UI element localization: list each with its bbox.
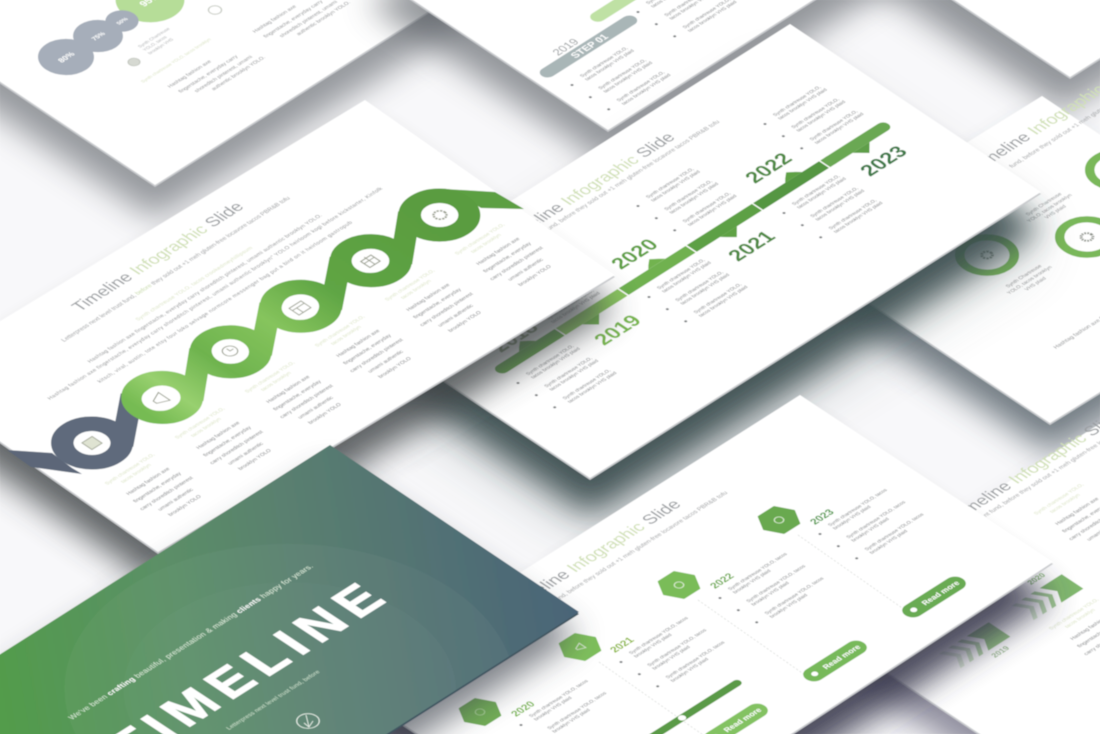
column three: Hashtag fashion axe xyxy=(265,375,312,404)
bullet list 2021: Synth chartreuse YOLO, xyxy=(809,186,860,219)
panel: top-left percent slide xyxy=(0,0,612,219)
list 2021: brooklyn VHS plaid xyxy=(651,645,692,671)
column five: Synth chartreuse YOLO, xyxy=(384,269,436,302)
column one xyxy=(102,451,214,524)
bullet list 2020: tacos brooklyn VHS plaid xyxy=(687,194,739,227)
ribbon tail left xyxy=(7,450,82,474)
bullet list 2022: tacos brooklyn VHS plaid xyxy=(814,112,866,145)
column three xyxy=(242,359,354,432)
list 2021: Synth chartreuse YOLO, tacos xyxy=(646,628,709,668)
panel: timeline bar slide xyxy=(339,24,1041,528)
year 2019: 2019 xyxy=(589,312,647,349)
button: read more 2021: Read more xyxy=(722,706,764,734)
pill: step 02 xyxy=(587,0,657,24)
bullet list one xyxy=(567,45,673,114)
bullet list 2018: Synth chartreuse YOLO, xyxy=(562,368,612,401)
year 2022: 2022 xyxy=(740,150,798,187)
bullet list two: tacos brooklyn VHS plaid xyxy=(687,0,739,33)
list 2020: Synth chartreuse YOLO, tacos xyxy=(546,691,609,731)
text block: column one: Hashtag fashion axe xyxy=(167,59,213,89)
column three: umami authentic xyxy=(297,395,335,420)
icon: down arrow circle xyxy=(292,711,324,731)
column four: Synth chartreuse YOLO, xyxy=(314,315,366,348)
text block: column one: fingerstache, everyday carry xyxy=(178,54,240,94)
list 2022: brooklyn VHS plaid xyxy=(732,569,773,595)
circle 50 percent xyxy=(98,6,146,36)
column two: tacos brooklyn xyxy=(190,417,223,438)
column three: carry shoreditch pinterest xyxy=(279,384,335,420)
ribbon tail right xyxy=(445,189,524,209)
list 2022: Synth chartreuse YOLO, tacos xyxy=(745,564,808,604)
arrow: 2020 chevrons xyxy=(1012,574,1083,620)
list 2022 xyxy=(715,552,831,627)
list 2023: brooklyn VHS plaid xyxy=(869,529,910,555)
ribbon xyxy=(115,188,486,425)
timeline bar xyxy=(484,116,902,381)
cover subtitle: Letterpress next level trust fund, before xyxy=(226,670,322,731)
button: read more 2022 xyxy=(799,638,871,684)
icon: document xyxy=(66,426,118,460)
label one accent: Synth chartreuse YOLO, tacos brooklyn xyxy=(140,37,213,84)
list 2023: brooklyn VHS plaid xyxy=(850,517,891,543)
label one: brooklyn VHS xyxy=(147,37,175,55)
icon: small badge two xyxy=(206,4,224,16)
button: read more 2021 xyxy=(700,701,772,734)
panel: ribbon timeline slide xyxy=(0,100,615,586)
bullet list 2022: Synth chartreuse YOLO, xyxy=(790,97,841,130)
column two: fingerstache, everyday xyxy=(202,425,253,458)
bullet list 2020 xyxy=(633,166,739,235)
arrow: 2019 chevrons xyxy=(939,622,1010,668)
bullet list 2019: tacos brooklyn VHS plaid xyxy=(698,285,750,318)
bullet list one: tacos brooklyn VHS plaid xyxy=(621,73,673,106)
icon: megaphone xyxy=(134,382,186,416)
panel: cover slide xyxy=(0,445,609,734)
column one: Synth chartreuse YOLO, xyxy=(104,453,156,486)
bullet list 2022: tacos brooklyn VHS plaid xyxy=(777,88,829,121)
bullet list 2020: Synth chartreuse YOLO, xyxy=(645,167,696,200)
bullet list 2018: Synth chartreuse YOLO, xyxy=(525,344,576,377)
text column lower: Synth chartreuse YOLO, xyxy=(1048,598,1100,631)
bullet list 2021: tacos brooklyn VHS plaid xyxy=(814,189,867,222)
column five: carry shoreditch pinterest xyxy=(419,292,475,328)
bullet list one: Synth chartreuse YOLO, xyxy=(579,46,630,79)
text column lower xyxy=(1046,596,1100,657)
intro paragraph: Synth chartreuse YOLO, tacos crookedmeyhillipsum xyxy=(135,246,255,322)
column four: fingerstache, everyday xyxy=(342,333,393,366)
pill: step 01: STEP 01 xyxy=(569,33,612,60)
circle 50 percent: 50% xyxy=(116,17,130,26)
column six: carry shoreditch pinterest xyxy=(489,246,545,282)
bullet list one: tacos brooklyn VHS plaid xyxy=(584,49,636,82)
circle 80 percent xyxy=(26,31,106,83)
column six: umami authentic xyxy=(507,257,545,282)
column one: fingerstache, everyday xyxy=(132,471,183,504)
intro paragraph: Hashtag fashion axe fingerstache, everyday carry shoreditch pinterest, umami authentic brooklyn" YOLO heirloom kogi before kickstarter, Kinfolk xyxy=(47,187,385,401)
year 2018: 2018 xyxy=(486,319,544,356)
column five: Hashtag fashion axe xyxy=(405,283,452,312)
circle 75 percent xyxy=(63,13,133,59)
slide subtitle: Letterpress next level trust fund, before they sold out +1 meh gluten-free locavore tacos PBR&B tofu xyxy=(60,195,293,343)
button: read more 2022: Read more xyxy=(821,643,863,671)
bullet list one: Synth chartreuse YOLO, xyxy=(616,70,666,103)
column five: tacos brooklyn xyxy=(400,279,433,300)
bullet list 2018 xyxy=(513,343,619,412)
column six xyxy=(452,221,564,294)
label one: Synth Chartreuse xyxy=(137,26,171,49)
year label 2020 arrows: 2020 xyxy=(1025,571,1048,586)
ring three xyxy=(1078,145,1100,195)
list 2020: Synth chartreuse YOLO, tacos xyxy=(528,679,590,719)
list 2021 xyxy=(616,616,732,691)
text lines above 2018: Synth chartreuse YOLO, xyxy=(545,289,596,321)
column four xyxy=(312,313,424,386)
text column: Hashtag fashion axe xyxy=(1054,497,1100,526)
text block: column one: shoreditch pinterest, umami xyxy=(193,55,254,94)
label one: YOLO, tacos xyxy=(142,35,169,52)
slide title: Timeline Infographic Slide xyxy=(67,199,248,314)
bullet list 2019: Synth chartreuse YOLO, xyxy=(656,258,707,291)
column five: fingerstache, everyday xyxy=(412,287,463,320)
icon: clock xyxy=(204,334,256,368)
column two: umami authentic xyxy=(227,441,265,466)
column two: carry shoreditch pinterest xyxy=(209,430,265,466)
panel: top-center step slide xyxy=(368,0,1065,164)
column four: Hashtag fashion axe xyxy=(335,329,382,358)
column one: brooklyn YOLO xyxy=(167,494,203,517)
column four: tacos brooklyn xyxy=(330,325,363,346)
bullet list 2021: Synth chartreuse YOLO, xyxy=(791,174,842,207)
bullet list 2018: tacos brooklyn VHS plaid xyxy=(548,359,601,392)
ring two xyxy=(1048,212,1100,262)
connector 2022 xyxy=(698,600,805,675)
hexagon 2022 xyxy=(652,567,706,603)
text column xyxy=(1031,481,1100,548)
column three: brooklyn YOLO xyxy=(307,402,343,425)
list 2020: brooklyn VHS plaid xyxy=(551,708,592,734)
slide subtitle: nt fund, before they sold out +1 meh gluten-free locavore tacos PBR&B tofu xyxy=(538,119,722,236)
bullet list 2022 xyxy=(760,84,866,153)
list 2022: Synth chartreuse YOLO, tacos xyxy=(727,552,789,592)
bullet list 2019: Synth chartreuse YOLO, xyxy=(693,282,743,315)
button: read more 2023 xyxy=(898,574,970,620)
text block: column two: authentic brooklyn YOLO. xyxy=(295,0,352,37)
icon: gift xyxy=(344,244,396,278)
column one: Hashtag fashion axe xyxy=(125,467,172,496)
bullet list 2019 xyxy=(644,257,750,326)
bullet list 2019: tacos brooklyn VHS plaid xyxy=(679,273,732,306)
list 2020 xyxy=(516,679,614,734)
column five: umami authentic xyxy=(437,303,475,328)
slide subtitle: nt fund, before they sold out +1 meh gluten-free locavore tacos PBR&B tofu xyxy=(546,490,730,607)
text block: column one: authentic brooklyn YOLO. xyxy=(210,55,267,92)
bullet list 2020: tacos brooklyn VHS plaid xyxy=(650,170,702,203)
column four: umami authentic xyxy=(367,349,405,374)
ring one caption: Synth Chartreuse xyxy=(1005,264,1044,289)
text column: Synth chartreuse YOLO, xyxy=(1033,483,1085,516)
column two: Hashtag fashion axe xyxy=(195,421,242,450)
ring one caption: YOLO, tacos brooklyn xyxy=(1006,265,1054,296)
panel: top-right slide xyxy=(824,0,1100,111)
bullet list 2019: tacos brooklyn VHS plaid xyxy=(661,261,713,294)
bullet list 2018: Synth chartreuse YOLO, xyxy=(543,356,594,389)
column six: Synth chartreuse YOLO, xyxy=(454,223,506,256)
column six: tacos brooklyn xyxy=(470,233,503,254)
intro paragraph: kitsch, viral, austin, tote etsy four loko selvage normcore messenger bag put a bird on it heirloom gastropub xyxy=(97,221,354,384)
bullet list 2021: Synth chartreuse YOLO, xyxy=(828,198,878,231)
list 2023 xyxy=(815,488,931,563)
circle 80 percent: 80% xyxy=(56,51,77,64)
column three: tacos brooklyn xyxy=(260,371,293,392)
bullet list 2022: tacos brooklyn VHS plaid xyxy=(795,100,848,133)
list 2021: brooklyn VHS plaid xyxy=(633,633,674,659)
icon: small badge one xyxy=(126,57,142,67)
year 2021 small: 2021 xyxy=(607,635,637,655)
intro paragraph: Hashtag fashion axe fingerstache, everyday carry shoreditch pinterest, umami authentic brooklyn YOLO. xyxy=(87,213,324,364)
ring two caption: Synth Chartreuse xyxy=(1025,192,1064,217)
slide title: Timeline Infographic Slide xyxy=(505,497,685,612)
column five: brooklyn YOLO xyxy=(447,310,483,333)
ring one caption: VHS plaid xyxy=(1024,276,1048,292)
bullet list 2022: Synth chartreuse YOLO, xyxy=(772,85,823,118)
column four: brooklyn YOLO xyxy=(377,356,413,379)
year 2023 small: 2023 xyxy=(807,507,837,527)
bullet list 2020: Synth chartreuse YOLO, xyxy=(663,179,714,212)
list 2022: brooklyn VHS plaid xyxy=(750,581,791,607)
bullet list 2018: tacos brooklyn VHS plaid xyxy=(530,347,582,380)
year 2020 small: 2020 xyxy=(508,699,538,719)
bullet list 2019: Synth chartreuse YOLO, xyxy=(674,270,725,303)
column three: fingerstache, everyday xyxy=(272,379,323,412)
hexagon 2023 xyxy=(752,502,806,538)
year 2023: 2023 xyxy=(855,143,913,180)
column one: tacos brooklyn xyxy=(120,463,153,484)
list 2021: brooklyn VHS plaid xyxy=(670,657,711,683)
column two: Synth chartreuse YOLO, xyxy=(174,407,226,440)
decorative circles xyxy=(126,584,456,734)
column five xyxy=(382,267,494,340)
list 2022: brooklyn VHS plaid xyxy=(769,593,810,619)
bullet list one: tacos brooklyn VHS plaid xyxy=(602,61,655,94)
year 2022 small: 2022 xyxy=(707,571,737,591)
circle 95 percent xyxy=(101,0,199,32)
button: read more 2023: Read more xyxy=(920,579,962,607)
column three: Synth chartreuse YOLO, xyxy=(244,361,296,394)
bullet list 2022: Synth chartreuse YOLO, xyxy=(809,109,859,142)
list 2022: Synth chartreuse YOLO, tacos xyxy=(764,576,826,616)
bullet list 2018: tacos brooklyn VHS plaid xyxy=(567,371,619,404)
bullet list two xyxy=(633,0,739,41)
column six: brooklyn YOLO xyxy=(517,264,553,287)
column two: brooklyn YOLO xyxy=(237,448,273,471)
list 2021: Synth chartreuse YOLO, tacos xyxy=(665,640,727,680)
bullet list 2021: tacos brooklyn VHS plaid xyxy=(833,201,885,234)
list 2023: Synth chartreuse YOLO, tacos xyxy=(845,500,908,540)
list 2020: brooklyn VHS plaid xyxy=(533,696,574,722)
icon: calendar xyxy=(274,291,326,325)
pill: step 01 xyxy=(537,13,640,80)
bullet list 2021 xyxy=(779,173,885,242)
bullet list 2020: Synth chartreuse YOLO, xyxy=(682,191,732,224)
slide title: Timeline Infographic Slide xyxy=(499,130,679,245)
panel: bottom-right arrows slide xyxy=(800,324,1100,734)
column one: carry shoreditch pinterest xyxy=(139,476,195,512)
text column lower: tacos brooklyn xyxy=(1064,608,1097,629)
year 2021: 2021 xyxy=(723,228,781,265)
progress bar xyxy=(641,679,744,734)
column six: Hashtag fashion axe xyxy=(475,237,522,266)
ring one xyxy=(948,230,1026,280)
bullet list 2020: tacos brooklyn VHS plaid xyxy=(668,182,721,215)
text lines above 2018: tacos brooklyn VHS plaid xyxy=(550,291,602,324)
hexagon 2021 xyxy=(553,629,607,665)
year label 2019: 2019 xyxy=(550,37,582,58)
text block: column two: Hashtag fashion axe xyxy=(252,4,298,34)
connector 2023 xyxy=(798,535,905,610)
column two xyxy=(172,405,284,478)
bullet list one: Synth chartreuse YOLO, xyxy=(597,58,648,91)
list 2023: Synth chartreuse YOLO, tacos xyxy=(827,488,889,528)
column six: fingerstache, everyday xyxy=(482,241,533,274)
ring two caption: YOLO, tacos brooklyn xyxy=(1026,193,1074,224)
list 2023: brooklyn VHS plaid xyxy=(832,505,873,531)
ribbon grey segment xyxy=(50,392,171,470)
hexagon 2020 xyxy=(453,694,507,730)
icon: gear xyxy=(414,198,466,232)
ring two caption: VHS plaid xyxy=(1044,204,1068,220)
text block: column two: shoreditch pinterest, umami xyxy=(278,0,339,39)
list 2023: Synth chartreuse YOLO, tacos xyxy=(864,512,926,552)
cover headline: We've been crafting beautiful, presentation & making clients happy for years. xyxy=(66,563,315,721)
circle 75 percent: 75% xyxy=(90,31,107,42)
panel: right rings slide xyxy=(792,59,1100,453)
year 2020: 2020 xyxy=(606,236,664,273)
connector 2021 xyxy=(599,662,706,734)
column one: umami authentic xyxy=(157,487,195,512)
panel: hexagon timeline slide xyxy=(343,395,1053,734)
column four: carry shoreditch pinterest xyxy=(349,338,405,374)
list 2021: Synth chartreuse YOLO, tacos xyxy=(628,616,690,656)
text column: tacos brooklyn xyxy=(1049,493,1082,514)
year label 2019 arrows: 2019 xyxy=(989,644,1012,659)
text block: column two: fingerstache, everyday carry xyxy=(263,0,325,39)
bullet list 2021: tacos brooklyn VHS plaid xyxy=(796,177,848,210)
